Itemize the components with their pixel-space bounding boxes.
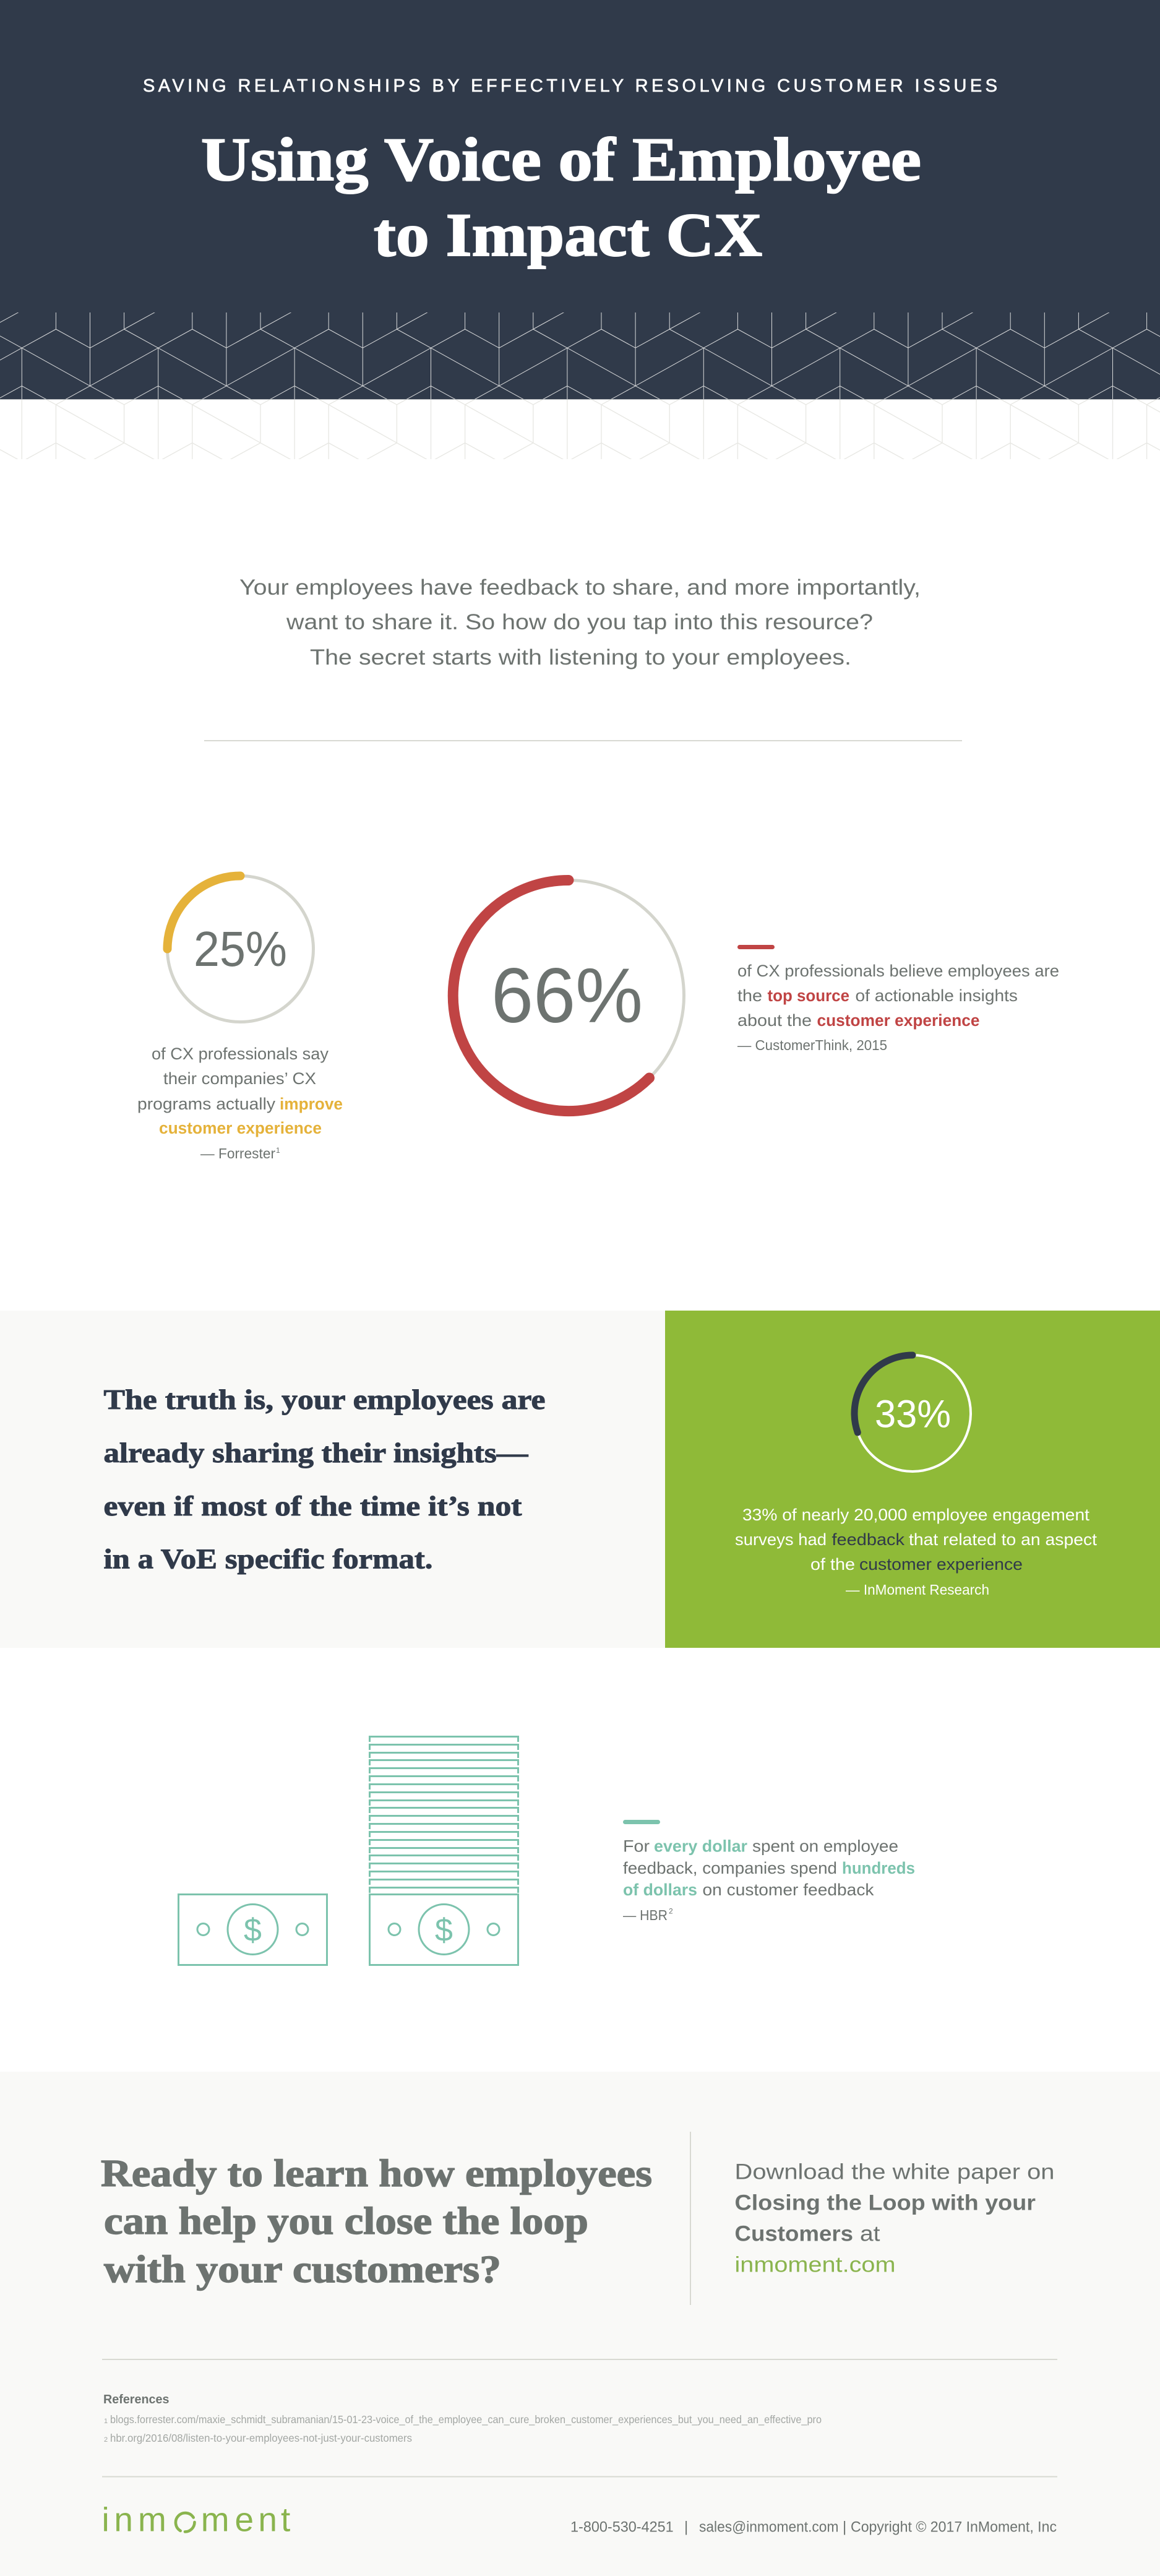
CTA download text: at <box>860 2221 880 2246</box>
66% caption: top source <box>767 986 849 1005</box>
teal accent dash <box>623 1820 660 1824</box>
dollar caption: every dollar <box>654 1837 747 1855</box>
logo: inmoment: inm <box>101 2501 166 2539</box>
33% value: 33% <box>875 1392 951 1436</box>
25% caption: 1 <box>276 1146 280 1155</box>
red accent dash <box>737 945 775 949</box>
33% caption: — InMoment Research <box>846 1582 989 1598</box>
footer contact line: | <box>684 2518 688 2536</box>
CTA download text: Customers <box>735 2221 853 2246</box>
references: hbr.org/2016/08/listen-to-your-employees-not-just-your-customers <box>110 2432 412 2444</box>
footer contact line: | <box>843 2518 846 2536</box>
statement heading <box>104 1384 546 1574</box>
33% caption: feedback <box>831 1530 905 1549</box>
ring chart: 25% <box>167 876 313 1022</box>
25% caption: of CX professionals say <box>152 1045 329 1063</box>
footer contact line <box>570 2518 1057 2536</box>
logo: inmoment <box>101 2501 290 2539</box>
CTA heading <box>101 2153 652 2291</box>
CTA download text: inmoment.com <box>735 2252 896 2277</box>
dollar caption: feedback, companies spend <box>623 1859 837 1877</box>
dollar caption: — HBR <box>623 1907 668 1923</box>
statement heading: already sharing their insights— <box>104 1437 529 1468</box>
icon: single dollar bill: $ <box>244 1912 262 1948</box>
title: Using Voice of Employee <box>201 125 921 194</box>
25% caption: their companies’ CX <box>163 1069 316 1088</box>
33% caption: of the <box>810 1555 855 1574</box>
dollar caption <box>623 1837 915 1923</box>
intro text: want to share it. So how do you tap into this resource? <box>286 610 873 634</box>
statement heading: The truth is, your employees are <box>104 1384 546 1415</box>
panel: dollar comparison <box>178 1736 915 1965</box>
CTA heading: with your customers? <box>104 2249 501 2291</box>
ring chart: 33% <box>854 1355 971 1471</box>
references: 2 <box>104 2436 108 2444</box>
33% caption: surveys had <box>735 1530 827 1549</box>
25% caption: improve <box>280 1095 343 1113</box>
25% value: 25% <box>194 921 287 976</box>
references: 1 <box>104 2418 108 2425</box>
CTA heading: Ready to learn how employees <box>101 2153 652 2195</box>
icon: stack of dollar bills: $ <box>435 1912 453 1948</box>
66% caption <box>737 962 1059 1053</box>
references: References <box>103 2393 170 2406</box>
dollar caption: spent on employee <box>752 1837 898 1855</box>
panel: truth statement <box>0 1311 665 1648</box>
dollar caption: hundreds <box>842 1859 915 1877</box>
intro text: Your employees have feedback to share, and more importantly, <box>239 575 921 600</box>
33% caption: 33% of nearly 20,000 employee engagement <box>742 1506 1090 1524</box>
dollar caption: For <box>623 1837 650 1855</box>
intro text <box>239 575 921 670</box>
panel: footer call to action <box>0 2072 1160 2576</box>
footer contact line: sales@inmoment.com <box>699 2518 838 2536</box>
footer contact line: Copyright © 2017 InMoment, Inc <box>851 2518 1057 2536</box>
references: blogs.forrester.com/maxie_schmidt_subramanian/15-01-23-voice_of_the_employee_can_cure_broken_customer_experiences_but_you_need_an_effective_pro <box>110 2413 822 2426</box>
title <box>201 125 921 269</box>
subtitle: SAVING RELATIONSHIPS BY EFFECTIVELY RESOLVING CUSTOMER ISSUES <box>143 76 997 96</box>
CTA heading: can help you close the loop <box>104 2200 588 2242</box>
CTA download text: Download the white paper on <box>735 2160 1054 2184</box>
66% caption: about the <box>737 1011 812 1030</box>
66% value: 66% <box>491 953 643 1039</box>
statement heading: even if most of the time it’s not <box>104 1490 522 1522</box>
icon: single dollar bill <box>178 1895 327 1965</box>
66% caption: customer experience <box>817 1011 980 1030</box>
panel: 25% stat <box>137 876 343 1161</box>
statement heading: in a VoE specific format. <box>104 1543 433 1574</box>
CTA download text <box>735 2160 1054 2277</box>
references <box>103 2393 822 2444</box>
33% caption <box>735 1506 1098 1598</box>
footer contact line: 1-800-530-4251 <box>570 2518 674 2536</box>
panel: 66% stat <box>453 880 1059 1111</box>
25% caption <box>137 1045 343 1161</box>
panel: header banner <box>0 0 1160 400</box>
25% caption: — Forrester <box>200 1145 275 1161</box>
dollar caption: on customer feedback <box>703 1880 874 1899</box>
panel: 33% stat <box>665 1311 1160 1648</box>
title: to Impact CX <box>374 200 762 269</box>
25% caption: customer experience <box>159 1119 322 1137</box>
66% caption: of CX professionals believe employees are <box>737 962 1059 980</box>
33% caption: customer experience <box>859 1555 1023 1574</box>
25% caption: programs actually <box>137 1095 276 1113</box>
icon: stack of dollar bills <box>370 1736 518 1965</box>
intro text: The secret starts with listening to your employees. <box>310 645 851 670</box>
66% caption: — CustomerThink, 2015 <box>737 1037 887 1053</box>
ring chart: 66% <box>453 880 684 1111</box>
33% caption: that related to an aspect <box>909 1530 1098 1549</box>
dollar caption: of dollars <box>623 1880 697 1899</box>
CTA download text: Closing the Loop with your <box>735 2190 1036 2215</box>
dollar caption: 2 <box>669 1907 673 1916</box>
66% caption: the <box>737 986 762 1005</box>
66% caption: of actionable insights <box>855 986 1018 1005</box>
logo: inmoment: ment <box>201 2501 290 2539</box>
